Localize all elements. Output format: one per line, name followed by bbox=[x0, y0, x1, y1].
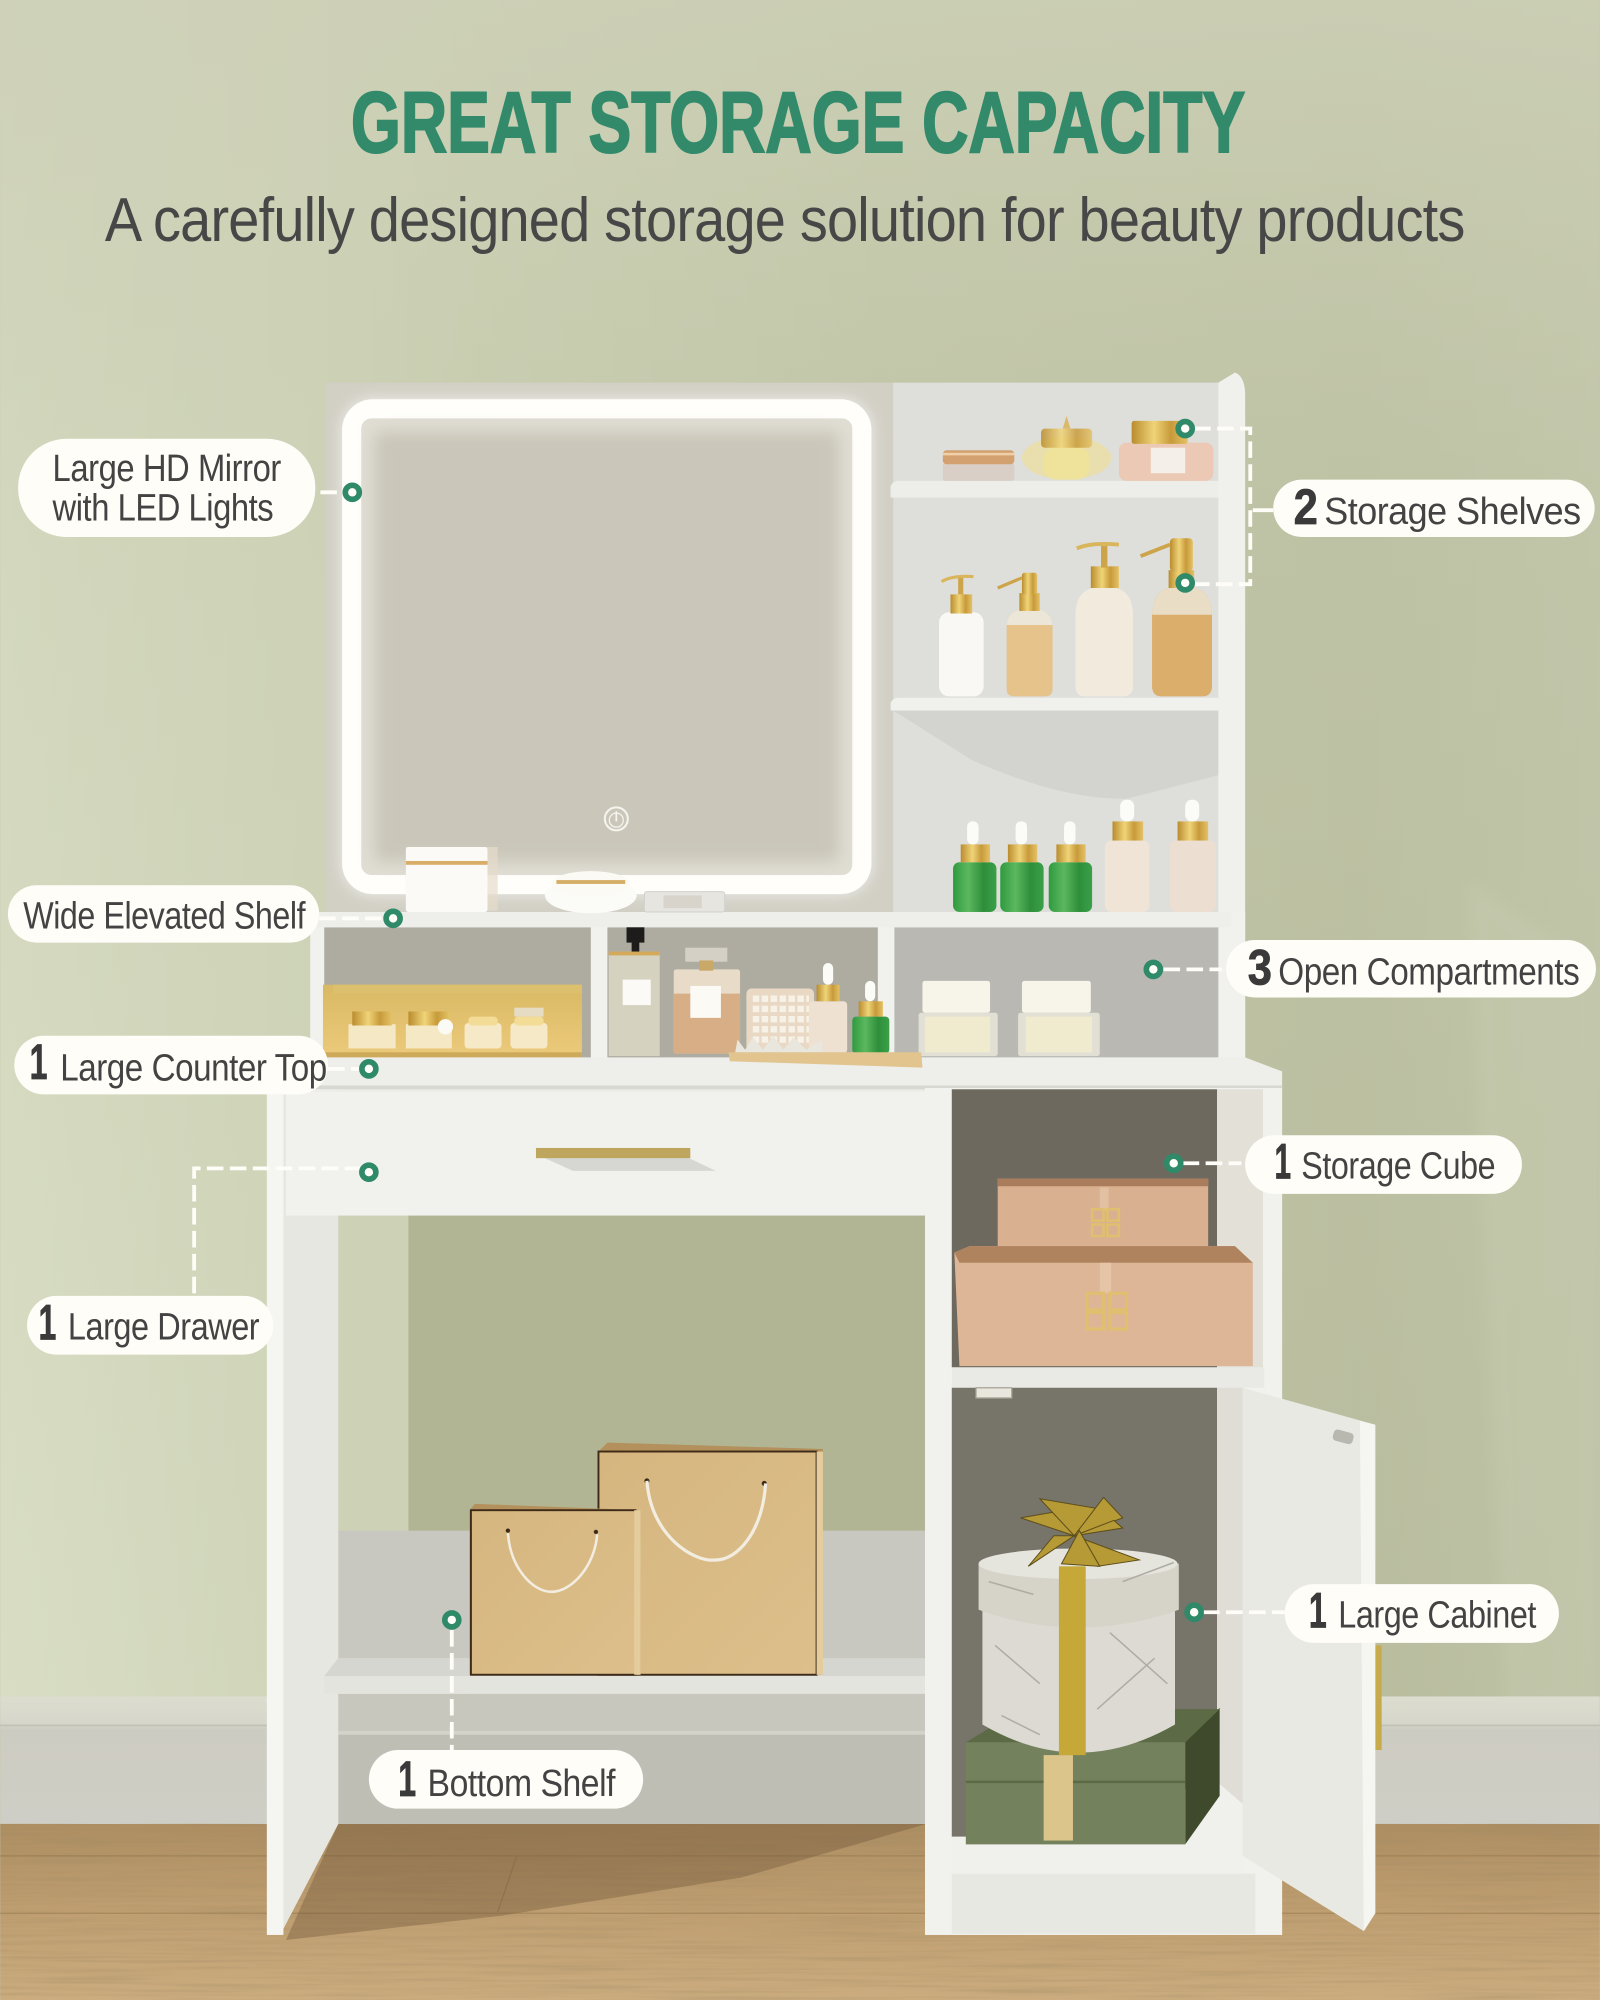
large peach box bbox=[954, 1246, 1253, 1366]
vanity table bbox=[267, 372, 1382, 1935]
cube back wall bbox=[952, 1089, 1217, 1367]
gold drawer handle shadow bbox=[545, 1158, 716, 1171]
cream jar right bbox=[1018, 981, 1100, 1056]
compartment opening middle bbox=[607, 927, 878, 1059]
fixed shelf bbox=[952, 1367, 1264, 1388]
left leg bbox=[267, 1088, 338, 1935]
callout: 1 Storage Cube: Storage Cube bbox=[1301, 1145, 1495, 1187]
callout: 1 Large Drawer: Large Drawer bbox=[68, 1305, 259, 1347]
dropper bottles on lower shelf bbox=[953, 800, 1216, 912]
compartment opening left bbox=[324, 927, 591, 1059]
large gift bag bbox=[598, 1443, 823, 1675]
callout: 2 Storage Shelves bbox=[1178, 422, 1595, 590]
green dropper 2 bbox=[1000, 821, 1044, 912]
pink cream jar bbox=[1119, 421, 1213, 481]
callout: Wide Elevated Shelf: Wide Elevated Shelf bbox=[23, 895, 306, 937]
white lotion pump bbox=[939, 576, 984, 696]
pump bottles on middle shelf bbox=[939, 538, 1212, 696]
callout: 3 Open Compartments bbox=[1146, 940, 1596, 997]
callout: Large HD Mirror with LED Lights: Large HD Mirror bbox=[53, 447, 281, 489]
callout: 1 Storage Cube: 1 bbox=[1274, 1134, 1291, 1190]
callout: 3 Open Compartments: 3 bbox=[1248, 940, 1272, 996]
compartment opening right bbox=[894, 927, 1218, 1059]
amber pump bbox=[998, 573, 1053, 696]
callout: Wide Elevated Shelf bbox=[8, 885, 400, 943]
callout: 2 Storage Shelves: Storage Shelves bbox=[1324, 490, 1581, 532]
cream jar left bbox=[919, 981, 998, 1056]
cream serum bottle bbox=[809, 963, 847, 1054]
callout: 1 Bottom Shelf bbox=[369, 1613, 643, 1809]
shelf shadow bbox=[893, 710, 1222, 799]
stacked peach storage boxes bbox=[954, 1179, 1253, 1366]
cube inner side bbox=[1217, 1089, 1263, 1367]
front gift bag bbox=[470, 1504, 641, 1675]
cream dropper 2 bbox=[1170, 800, 1216, 912]
green gift box bbox=[966, 1708, 1220, 1844]
large amber pump bbox=[1141, 538, 1212, 696]
callout: 1 Large Counter Top: 1 bbox=[30, 1034, 47, 1090]
marble round gift box bbox=[979, 1497, 1179, 1755]
small jar 4 bbox=[510, 1008, 547, 1048]
wood floor bbox=[0, 1824, 1600, 2000]
title: GREAT STORAGE CAPACITY bbox=[351, 74, 1245, 171]
callout: 1 Large Cabinet: 1 bbox=[1309, 1583, 1327, 1639]
callout: Large HD Mirror with LED Lights: with LED Lights bbox=[52, 486, 273, 528]
shelf unit back bbox=[893, 383, 1222, 916]
lower back wall bbox=[952, 1388, 1217, 1837]
wall seen through leg opening bbox=[338, 1216, 926, 1534]
counter top bbox=[267, 1057, 1282, 1094]
cream dropper 1 bbox=[1105, 800, 1149, 912]
callout: 1 Large Drawer: 1 bbox=[39, 1294, 56, 1350]
middle shelf bbox=[891, 698, 1231, 710]
mirror with LED frame bbox=[342, 399, 871, 894]
icon: mirror touch switch bbox=[605, 807, 628, 830]
items in front of mirror bbox=[406, 847, 725, 913]
callout: 2 Storage Shelves: 2 bbox=[1294, 479, 1318, 535]
drawer bbox=[286, 1092, 936, 1216]
tall side panel bbox=[1218, 372, 1245, 1059]
rose gold jar bbox=[943, 450, 1014, 481]
right cabinet carcass bbox=[925, 1088, 1282, 1935]
tall black pump bottle bbox=[609, 927, 660, 1056]
small green serum bottle bbox=[852, 981, 889, 1054]
elevated shelf board bbox=[317, 912, 1231, 927]
back panel and low wall behind shelf bbox=[338, 1531, 926, 1824]
subtitle: A carefully designed storage solution for beauty products bbox=[105, 185, 1465, 255]
callout: 1 Large Counter Top bbox=[14, 1034, 376, 1094]
hutch back panel behind mirror bbox=[326, 383, 893, 916]
callout: 1 Bottom Shelf: Bottom Shelf bbox=[428, 1762, 616, 1804]
clear glass dish bbox=[644, 892, 725, 912]
callout: 1 Bottom Shelf: 1 bbox=[398, 1751, 416, 1807]
small peach box bbox=[998, 1179, 1208, 1261]
callout: 1 Large Drawer bbox=[27, 1165, 376, 1355]
callout: 1 Large Cabinet bbox=[1187, 1583, 1559, 1643]
white cylinder jar bbox=[406, 847, 498, 912]
gold clasp large bbox=[1087, 1293, 1127, 1329]
green dropper 1 bbox=[953, 821, 996, 912]
round white compact bbox=[545, 871, 637, 913]
small jar 2 bbox=[406, 1011, 453, 1048]
yellow crown jar bbox=[1022, 416, 1111, 480]
gold bow bbox=[1021, 1497, 1139, 1566]
open cabinet door bbox=[1243, 1388, 1382, 1931]
green dropper 3 bbox=[1049, 821, 1092, 912]
wooden hair brush bbox=[729, 1036, 922, 1068]
jars on upper shelf bbox=[943, 416, 1213, 481]
hinge bbox=[976, 1388, 1012, 1398]
small jar 1 bbox=[348, 1011, 396, 1048]
callout: 1 Storage Cube bbox=[1167, 1134, 1522, 1194]
callout: Large HD Mirror with LED Lights bbox=[18, 439, 359, 537]
amber acrylic organizer box bbox=[323, 985, 582, 1059]
baseboard bbox=[0, 1696, 1600, 1824]
lower inner side bbox=[1217, 1388, 1244, 1811]
bottom shelf board bbox=[324, 1658, 926, 1694]
floor shadow under vanity bbox=[286, 1824, 926, 1940]
callout: 1 Large Counter Top: Large Counter Top bbox=[60, 1046, 327, 1088]
gold drawer handle bbox=[536, 1148, 690, 1158]
callout: 1 Large Cabinet: Large Cabinet bbox=[1338, 1594, 1537, 1636]
cotton swab jar bbox=[746, 989, 814, 1052]
upper shelf bbox=[891, 481, 1231, 497]
cream pump bbox=[1076, 544, 1133, 696]
gold clasp small bbox=[1092, 1209, 1119, 1236]
perfume bottle bbox=[674, 948, 740, 1054]
plinth bbox=[952, 1874, 1255, 1934]
small jar 3 bbox=[465, 1017, 502, 1048]
cabinet floor bbox=[952, 1782, 1244, 1874]
compartment row bbox=[310, 912, 1245, 1059]
